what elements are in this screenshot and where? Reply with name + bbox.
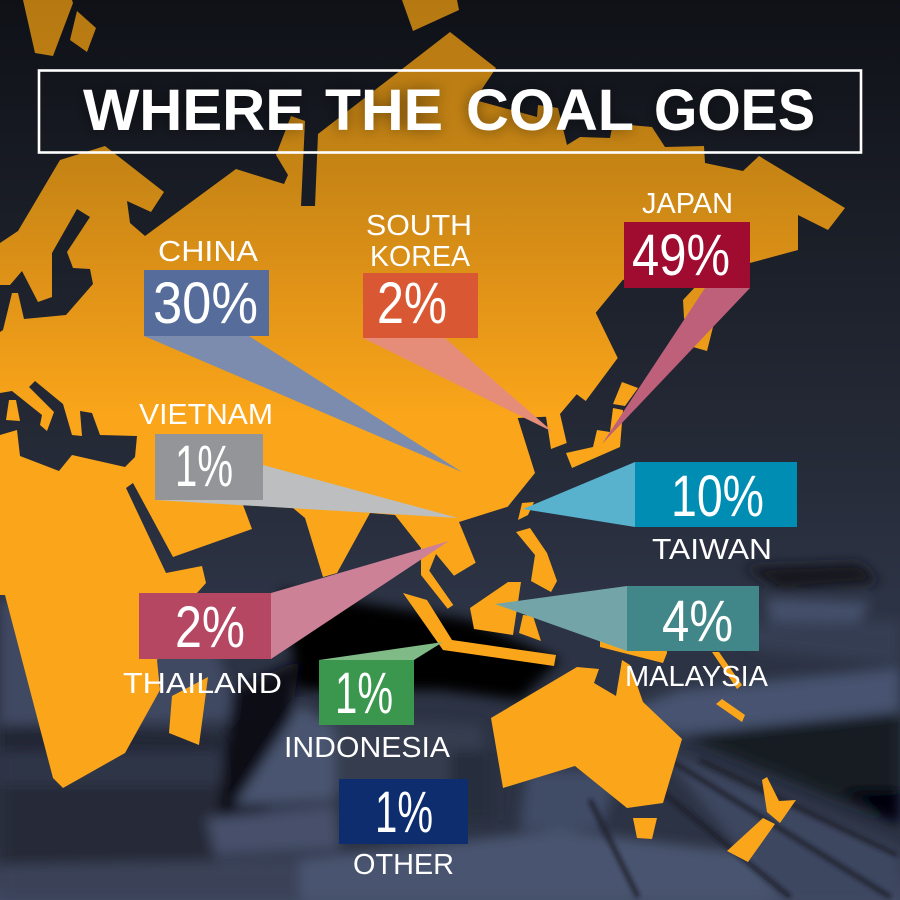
callout: south korea 2%: SOUTH (366, 210, 472, 242)
callout: taiwan 10% (523, 462, 797, 566)
callout: thailand 2%: THAILAND (123, 668, 282, 700)
callout: malaysia 4%: MALAYSIA (625, 661, 769, 693)
callout: japan 49%: 49% (632, 223, 730, 288)
map: small mediterranean island (6, 400, 20, 421)
map: tasmania (633, 818, 657, 839)
map: borneo (470, 582, 521, 635)
title: THE (325, 78, 443, 143)
map: new guinea (600, 625, 667, 663)
map: sulawesi (519, 615, 541, 641)
callout: china 30%: 30% (153, 271, 258, 336)
left horizon (0, 600, 240, 725)
right ship and quay (743, 563, 880, 590)
callout: vietnam 1%: VIETNAM (139, 399, 273, 431)
callout: taiwan 10%: TAIWAN (652, 534, 772, 566)
callout: other 1%: 1% (375, 780, 433, 845)
callout: china 30% (144, 236, 462, 472)
callout: south korea 2%: KOREA (370, 241, 471, 273)
map: madagascar shape (169, 677, 208, 745)
callout: south korea 2%: 2% (377, 271, 447, 336)
callout: thailand 2% (123, 541, 449, 700)
title (39, 70, 861, 152)
callout: malaysia 4% (495, 586, 769, 693)
central black area (280, 590, 560, 700)
map: japan islands (566, 382, 638, 468)
callout: thailand 2%: 2% (175, 595, 245, 660)
callout: indonesia 1%: 1% (335, 661, 393, 726)
callout: other 1% (339, 779, 468, 881)
map: northern islands (23, 0, 459, 56)
map: sumatra and java (403, 593, 556, 666)
callout: indonesia 1%: INDONESIA (284, 732, 451, 764)
map: eurasia mainland (0, 32, 845, 788)
callout: japan 49% (602, 188, 750, 444)
title: GOES (654, 78, 815, 143)
map: sakhalin shape (683, 285, 725, 351)
map: philippines (516, 528, 557, 592)
callout: other 1%: OTHER (353, 849, 454, 881)
map: australia (491, 660, 682, 808)
callout: china 30%: CHINA (158, 236, 259, 268)
map: taiwan (518, 502, 534, 520)
map: new zealand (727, 777, 796, 862)
callout: malaysia 4%: 4% (662, 589, 733, 654)
callout: indonesia 1% (284, 642, 451, 764)
callout: japan 49%: JAPAN (642, 188, 733, 220)
callout: vietnam 1%: 1% (175, 434, 233, 499)
callout: taiwan 10%: 10% (671, 464, 764, 529)
callout: south korea 2% (363, 210, 553, 432)
callout: vietnam 1% (139, 399, 458, 518)
title: WHERE (83, 78, 305, 143)
map: pacific islands (712, 652, 745, 722)
title: COAL (466, 78, 634, 143)
